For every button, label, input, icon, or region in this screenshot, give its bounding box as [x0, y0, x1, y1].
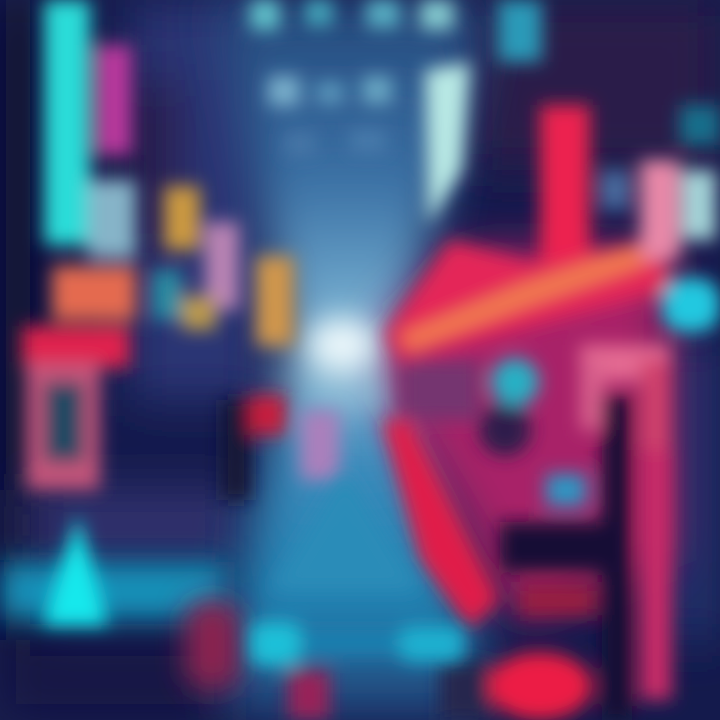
floor cyan lights: [250, 470, 464, 720]
central corridor: [215, 0, 490, 720]
central glow: [308, 319, 380, 402]
ceiling lights: [250, 0, 542, 154]
right red mass: [390, 250, 670, 620]
left cyan floor glow: [0, 515, 240, 690]
left neon signs: [22, 0, 340, 500]
right neon signs: [382, 62, 720, 720]
